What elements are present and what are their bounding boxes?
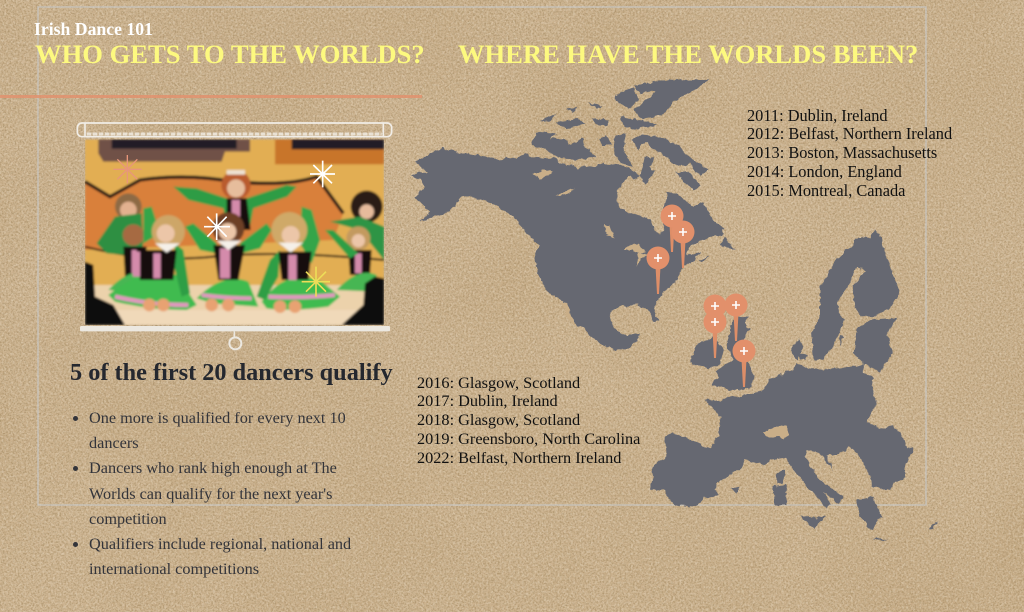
host cities 2011 to 2015: 2014: London, England (747, 162, 902, 181)
host cities 2016 to 2022: 2018: Glasgow, Scotland (417, 410, 580, 429)
host cities 2016 to 2022: 2017: Dublin, Ireland (417, 391, 558, 410)
qualification bullet list: One more is qualified for every next 10 dancers (89, 409, 346, 452)
right front dancer (257, 207, 358, 313)
heading: where have the worlds been: WHERE HAVE THE WORLDS BEEN? (458, 39, 918, 69)
host cities 2011 to 2015: 2015: Montreal, Canada (747, 181, 905, 200)
qualification bullet list: Dancers who rank high enough at The Worlds can qualify for the next year's competition (89, 459, 337, 528)
audience silhouettes (85, 262, 125, 325)
scroll bottom bar and pull (80, 326, 390, 331)
thin frame (38, 7, 926, 505)
photograph (85, 139, 384, 325)
host cities 2016 to 2022: 2019: Greensboro, North Carolina (417, 429, 640, 448)
sparkles (113, 155, 142, 183)
subheading: qualification: 5 of the first 20 dancers qualify (70, 359, 393, 386)
scroll top roller (77, 123, 392, 137)
centre back dancer (173, 170, 297, 230)
map: Europe (650, 230, 938, 540)
stage backdrop (85, 139, 384, 286)
eyebrow title: Irish Dance 101 (34, 19, 153, 39)
qualification bullet list: Qualifiers include regional, national and international competitions (89, 535, 351, 578)
map pins (646, 204, 756, 387)
host cities 2011 to 2015: 2013: Boston, Massachusetts (747, 143, 937, 162)
orange divider (0, 95, 422, 98)
back dancers (97, 191, 384, 293)
left front dancer (108, 207, 197, 311)
map (412, 79, 938, 540)
qualification bullet list (73, 409, 351, 578)
map: North America (412, 79, 735, 349)
host cities 2016 to 2022: 2016: Glasgow, Scotland (417, 372, 580, 392)
stage floor (92, 284, 367, 312)
host cities 2016 to 2022: 2022: Belfast, Northern Ireland (417, 448, 621, 467)
host cities 2011 to 2015: 2011: Dublin, Ireland (747, 106, 888, 124)
host cities 2011 to 2015: 2012: Belfast, Northern Ireland (747, 124, 952, 143)
heading: who gets to the worlds: WHO GETS TO THE WORLDS? (35, 39, 425, 69)
host cities 2016 to 2022 (417, 372, 640, 467)
host cities 2011 to 2015 (747, 106, 952, 200)
photo of dancers on a scroll (77, 123, 392, 349)
centre front dancer (185, 212, 272, 311)
